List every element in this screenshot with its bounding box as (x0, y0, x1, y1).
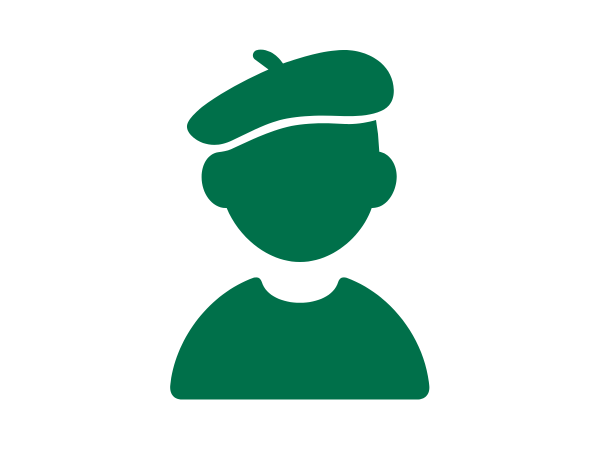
beret with stem (187, 50, 394, 145)
face with ears (202, 120, 397, 262)
torso with neckline (170, 277, 429, 400)
